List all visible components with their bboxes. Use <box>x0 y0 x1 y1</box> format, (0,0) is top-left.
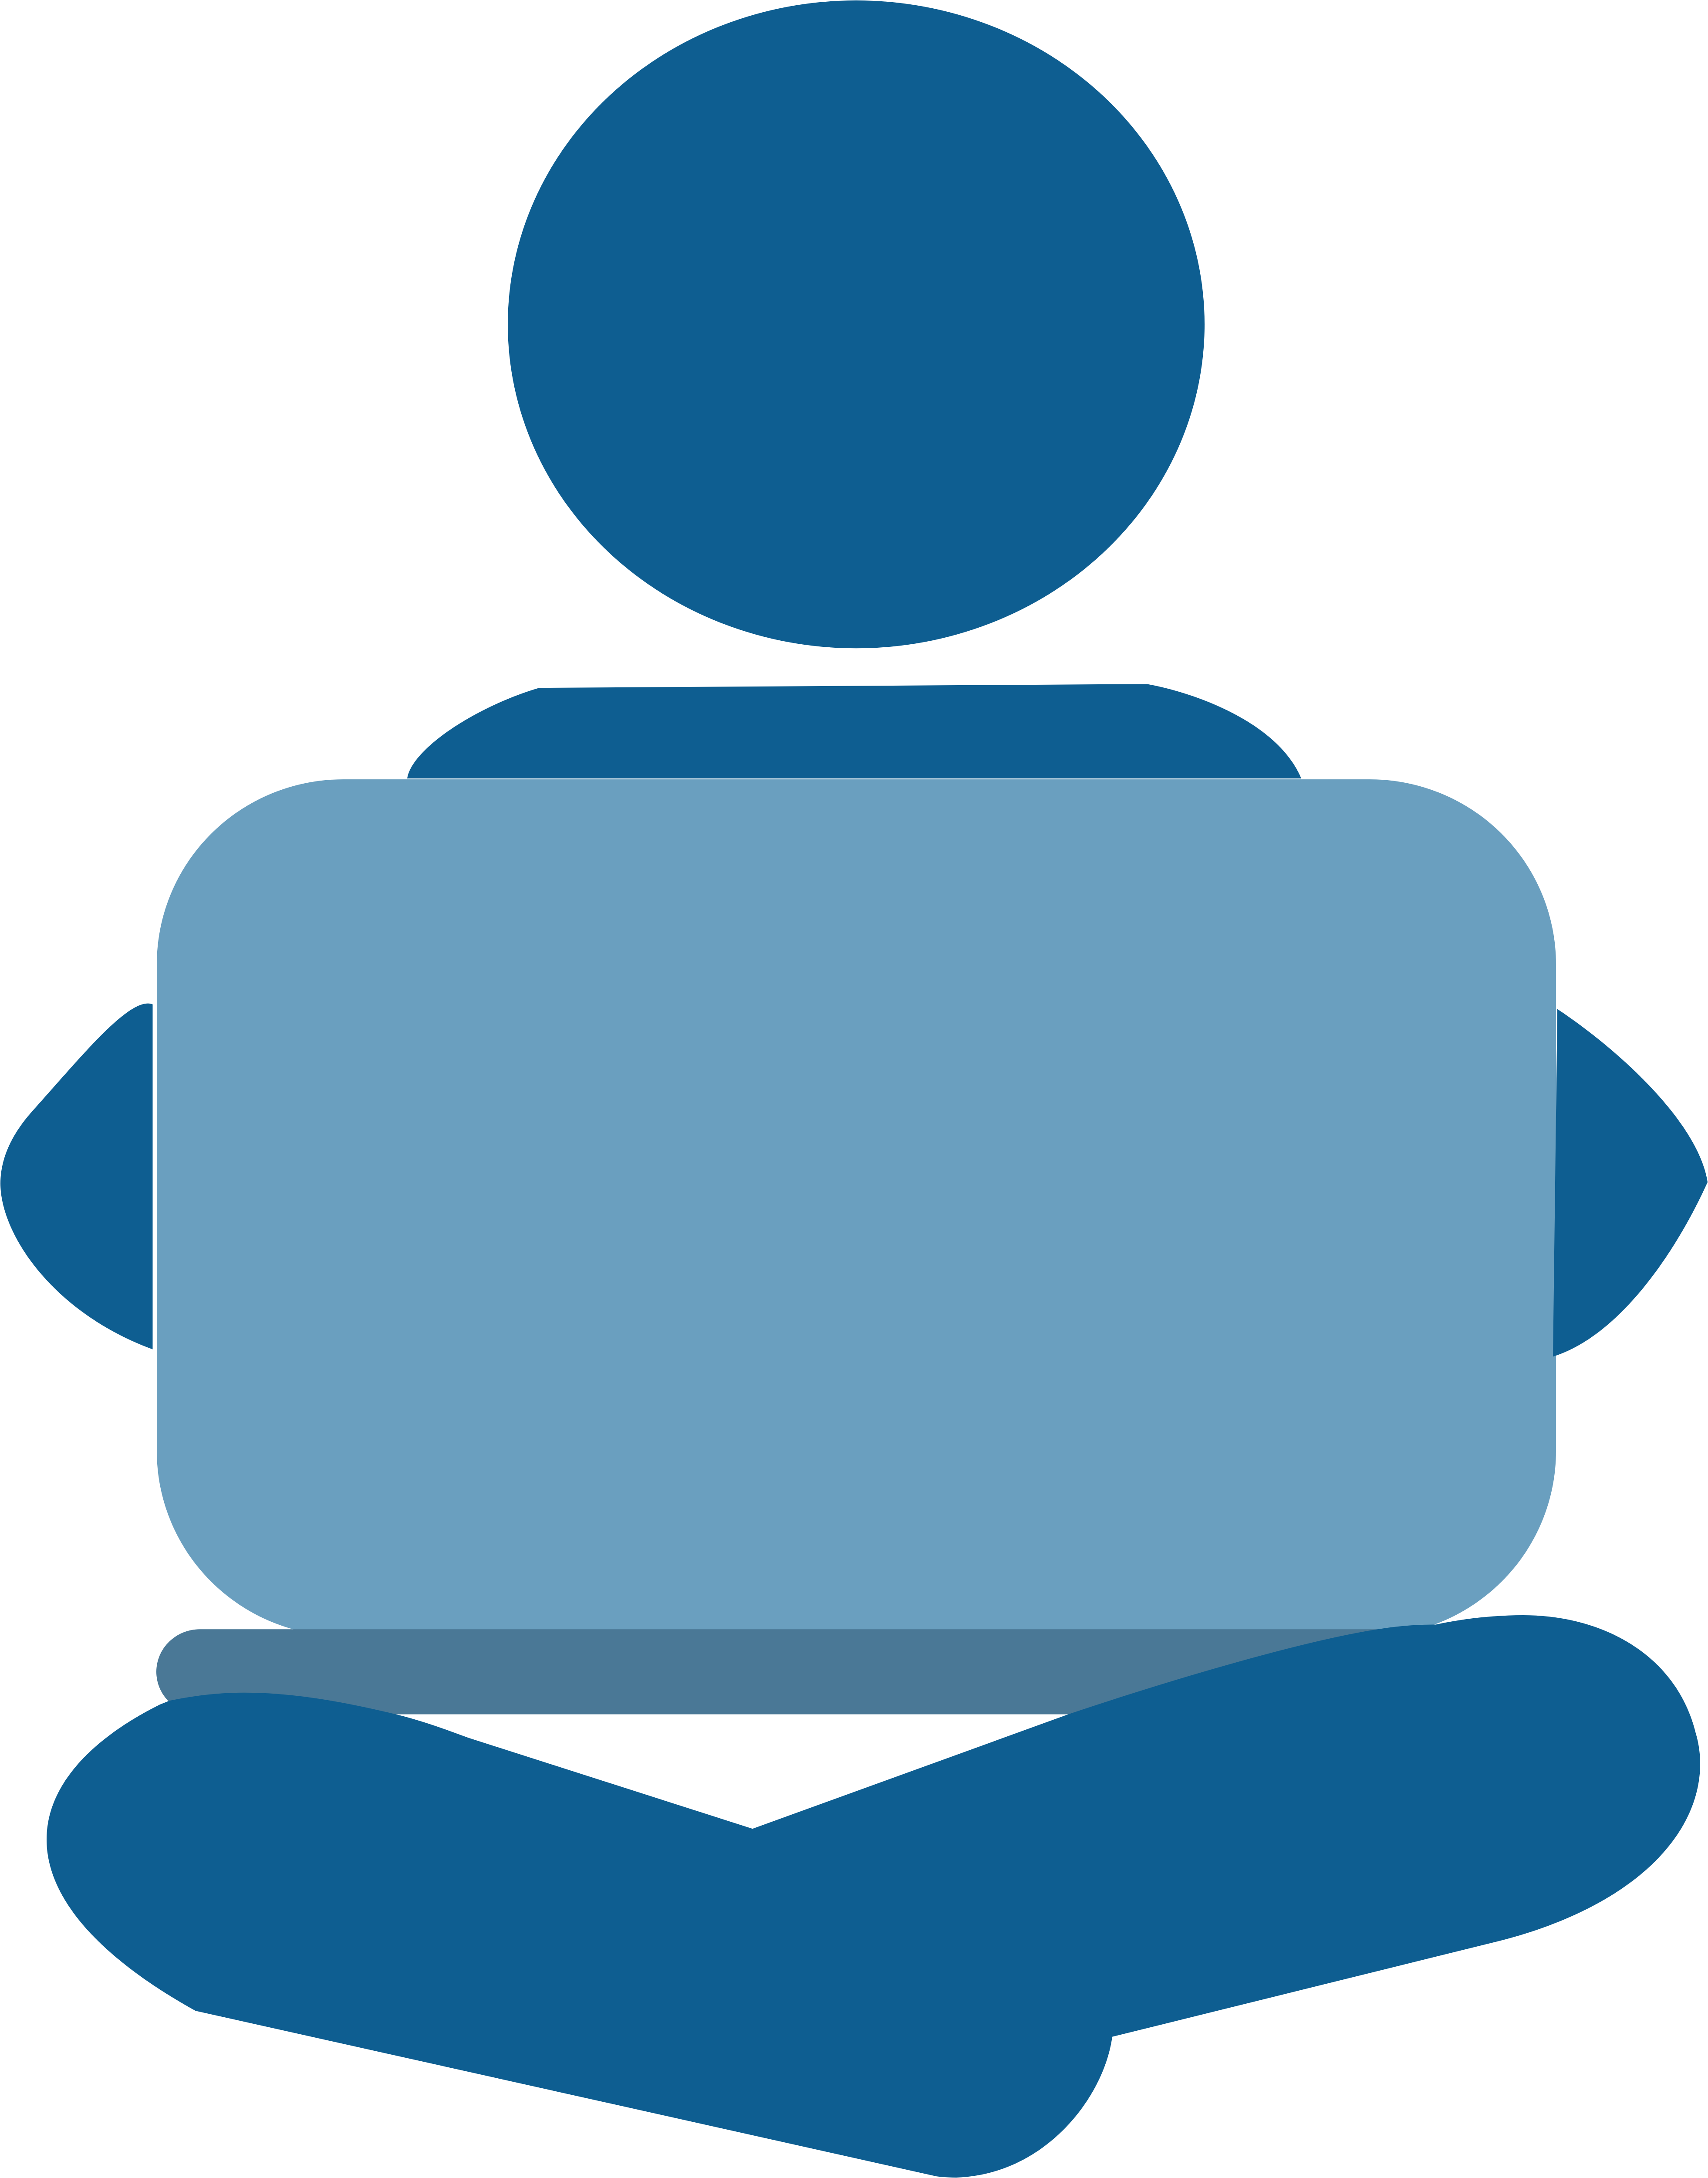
icon: shoulders <box>407 684 1301 778</box>
panel: laptop base <box>156 1629 1437 1715</box>
icon: head <box>508 0 1205 648</box>
icon: right arm <box>1553 1009 1708 1356</box>
icon: left arm <box>0 1004 152 1349</box>
icon: crossed legs <box>47 1615 1700 2178</box>
panel: laptop screen <box>157 779 1556 1636</box>
